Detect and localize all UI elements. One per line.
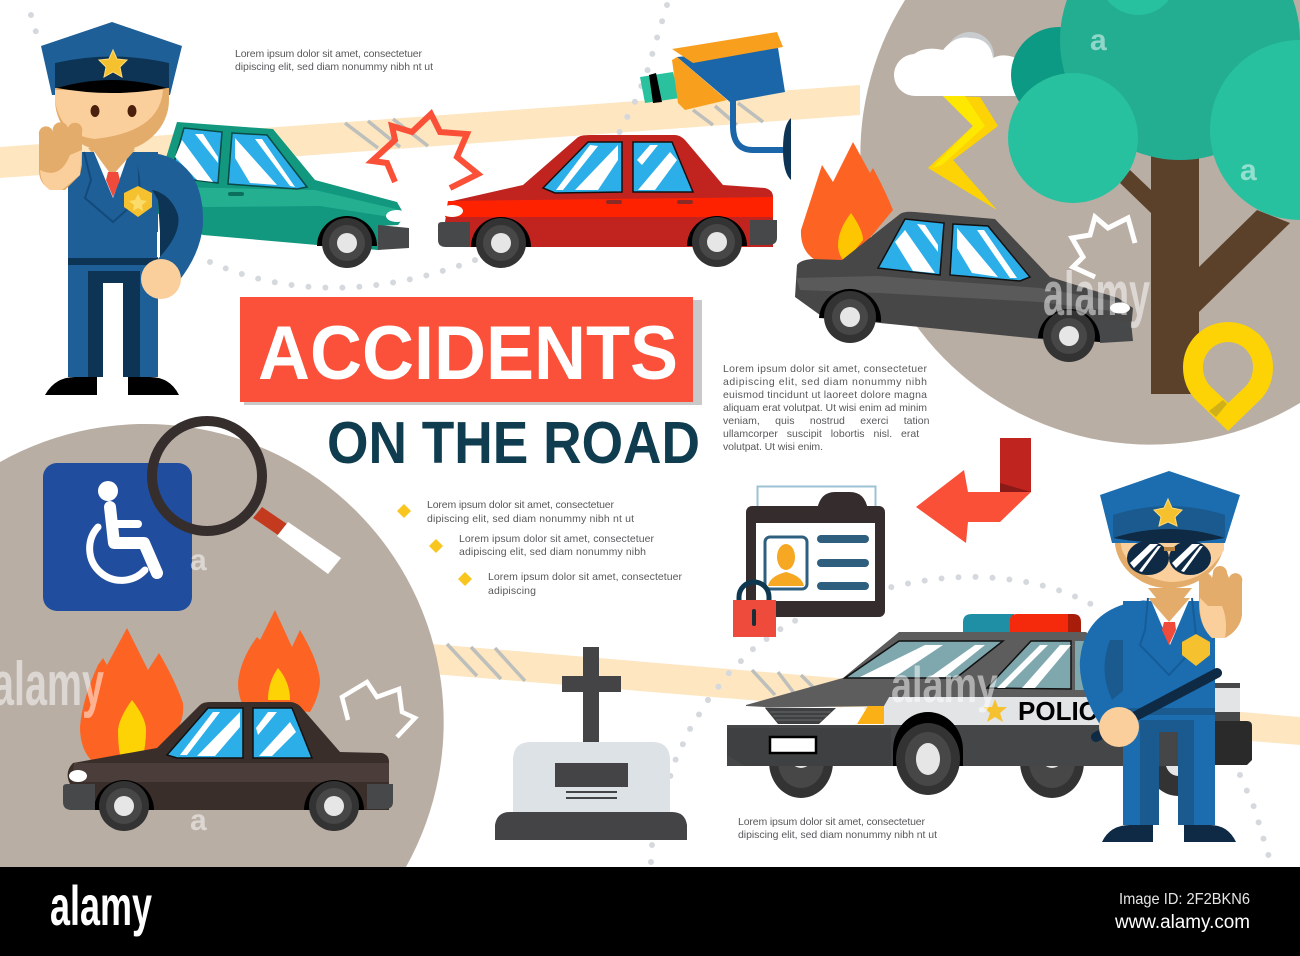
- bullet list: Lorem ipsum dolor sit amet, consectetuer: [459, 533, 654, 545]
- car: grey burning car crashing into tree: [795, 142, 1133, 362]
- watermarks: alamy: [1043, 260, 1150, 329]
- watermarks: a: [1090, 24, 1107, 57]
- icon: red turn arrow: [916, 438, 1031, 543]
- hat: [1100, 471, 1240, 543]
- text block: top: [235, 48, 433, 73]
- text block: description paragraph: euismod tincidunt ut laoreet dolore magna: [723, 389, 927, 401]
- police car: [727, 614, 1252, 798]
- icon: ID card: [746, 486, 885, 617]
- bullet list: adipiscing elit, sed diam nonummy nibh: [459, 546, 646, 558]
- panel: beige circle bottom left: [0, 424, 444, 867]
- text block: top: dipiscing elit, sed diam nonummy nibh nt ut: [235, 61, 433, 73]
- icon: map pin: [1183, 322, 1273, 431]
- watermarks: a: [190, 544, 207, 577]
- uniform: [45, 150, 179, 395]
- police car: POLICE: [1018, 696, 1115, 726]
- text block: description paragraph: aliquam erat volutpat. Ut wisi enim ad minim: [723, 402, 927, 414]
- bullet list: Lorem ipsum dolor sit amet, consectetuer: [488, 571, 682, 583]
- text block: top: Lorem ipsum dolor sit amet, consectetuer: [235, 48, 422, 60]
- flame: [801, 142, 893, 262]
- icon: gravestone: [495, 647, 687, 840]
- legs: [1102, 715, 1236, 842]
- footer bar: www.alamy.com: [1114, 912, 1250, 933]
- footer bar: alamy: [50, 874, 152, 937]
- text block: description paragraph: volutpat. Ut wisi enim.: [723, 441, 823, 453]
- watermarks: a: [190, 804, 207, 837]
- car: red car: [438, 135, 777, 268]
- icon: padlock: [733, 582, 776, 637]
- text block: description paragraph: [723, 363, 930, 453]
- icon: red crash burst: [372, 114, 478, 188]
- text block: description paragraph: veniam, quis nostrud exerci tation: [723, 415, 930, 427]
- raised hand: [1199, 566, 1242, 638]
- icon: lightning: [928, 96, 998, 210]
- sunglasses: [1127, 541, 1211, 575]
- watermarks: alamy: [891, 657, 998, 713]
- text block: bottom: [738, 816, 937, 841]
- icon: cloud: [894, 32, 1020, 96]
- icon: white impact burst at tree: [1072, 217, 1135, 277]
- bullet list: Lorem ipsum dolor sit amet, consectetuer: [427, 499, 614, 511]
- icon: wheelchair sign: [43, 463, 192, 611]
- bullet list: adipiscing: [488, 585, 536, 597]
- police officer left: [39, 22, 203, 395]
- subtitle: ON THE ROAD: [327, 410, 700, 476]
- title: accidents banner: ACCIDENTS: [258, 311, 678, 396]
- bullet list: dipiscing elit, sed diam nonummy nibh nt ut: [427, 513, 634, 525]
- panel: beige circle top right: [860, 0, 1300, 445]
- arm: [135, 152, 203, 299]
- text block: description paragraph: ullamcorper suscipit lobortis nisl. erat: [723, 428, 919, 440]
- face: [55, 80, 169, 176]
- car: green car: [150, 122, 409, 268]
- lower hand: [1099, 707, 1139, 747]
- footer bar: [0, 867, 1300, 956]
- baton: [1096, 673, 1217, 737]
- police officer right: [1080, 471, 1242, 842]
- icon: magnifying glass: [152, 421, 341, 574]
- footer bar: Image ID: 2F2BKN6: [1119, 891, 1250, 908]
- bullet list: [397, 499, 682, 597]
- text block: bottom: Lorem ipsum dolor sit amet, consectetuer: [738, 816, 926, 828]
- light bar: [963, 614, 1081, 632]
- tree: [1008, 0, 1300, 394]
- text block: description paragraph: Lorem ipsum dolor sit amet, consectetuer: [723, 363, 928, 375]
- head: [1115, 540, 1224, 615]
- car: black burning car: [63, 610, 393, 831]
- text block: bottom: dipiscing elit, sed diam nonummy nibh nt ut: [738, 829, 937, 841]
- icon: security camera: [640, 32, 791, 180]
- hat: [41, 22, 182, 95]
- watermarks: a: [1240, 154, 1257, 187]
- flames: [80, 610, 320, 762]
- text block: description paragraph: adipiscing elit, sed diam nonummy nibh: [723, 376, 927, 388]
- icon: white burst by black car: [342, 682, 415, 737]
- torso and arm: [1080, 598, 1215, 728]
- raised hand: [39, 122, 82, 190]
